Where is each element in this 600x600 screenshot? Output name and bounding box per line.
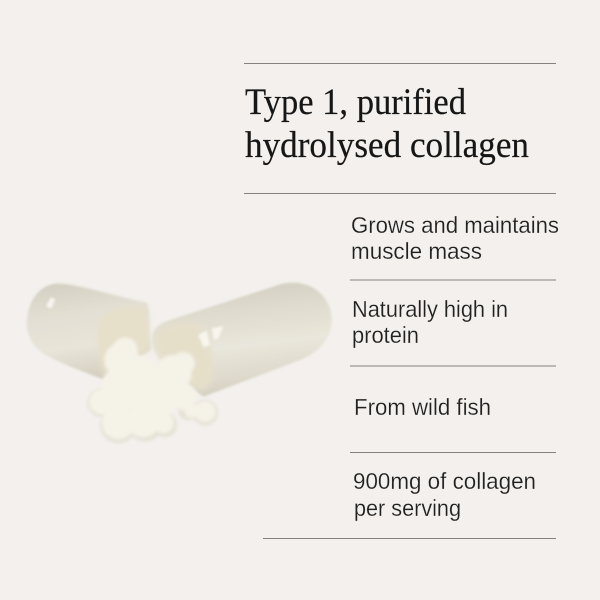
capsule illustration bbox=[27, 283, 332, 443]
title: Type 1, purified bbox=[245, 82, 466, 123]
title: hydrolysed collagen bbox=[245, 125, 529, 166]
benefit: wild fish: From wild fish bbox=[354, 394, 491, 420]
benefit: muscle: Grows and maintains bbox=[351, 212, 559, 238]
benefit: protein: Naturally high in bbox=[352, 296, 508, 322]
powder shadow edge bbox=[88, 389, 218, 443]
title divider bbox=[244, 192, 556, 194]
benefit: protein bbox=[352, 296, 508, 348]
spilled powder bbox=[88, 337, 218, 443]
title bbox=[245, 82, 529, 166]
benefit: protein: protein bbox=[352, 322, 419, 348]
benefit: collagen per serving bbox=[353, 468, 536, 521]
powder body bbox=[89, 337, 216, 439]
left capsule half bbox=[27, 284, 151, 379]
benefit: muscle: muscle mass bbox=[351, 238, 482, 264]
benefit: muscle bbox=[351, 212, 559, 264]
benefit: collagen per serving: 900mg of collagen bbox=[353, 468, 536, 494]
right capsule half bbox=[152, 283, 332, 397]
bottom divider bbox=[263, 538, 556, 540]
benefit: collagen per serving: per serving bbox=[354, 495, 461, 521]
top divider bbox=[244, 62, 556, 64]
